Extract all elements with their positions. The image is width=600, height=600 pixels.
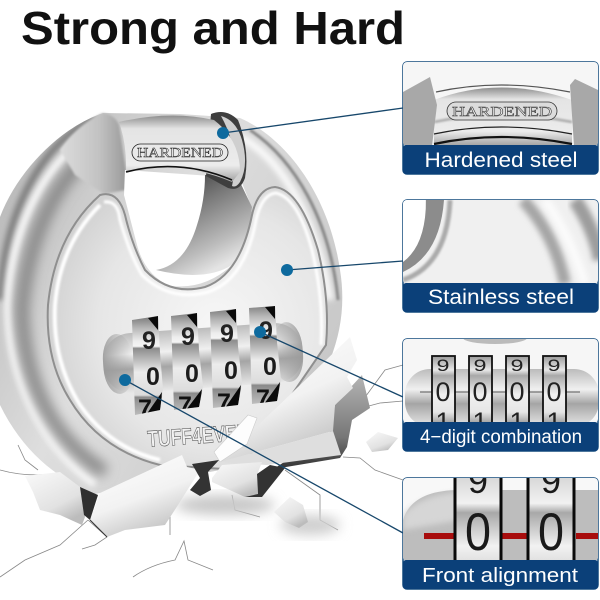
chunk: center crack xyxy=(190,460,219,496)
hardened stamp: HARDENED xyxy=(137,146,223,161)
chunk: dark right underside xyxy=(262,375,370,478)
padlock xyxy=(0,112,342,494)
raised plate xyxy=(48,187,327,470)
panel: 4-digit combination xyxy=(403,332,599,451)
panel: 4-digit combination: 1 xyxy=(509,407,525,437)
chunk: far left xyxy=(25,472,85,525)
combination bar xyxy=(101,321,305,395)
wheel 4 xyxy=(249,306,280,404)
wheel 2: 0 xyxy=(185,360,199,388)
wheel 3: 0 xyxy=(224,357,238,385)
panel: front alignment: 9 xyxy=(468,460,488,501)
wheel 1: 9 xyxy=(142,327,156,355)
chunk: center xyxy=(212,462,262,497)
wheel 3: 7 xyxy=(217,389,231,417)
wheel 1: 7 xyxy=(138,395,152,423)
broken ground chunks xyxy=(25,337,398,537)
panel: front alignment: Front alignment xyxy=(422,565,578,587)
chunk: pebble by panel xyxy=(366,432,398,452)
chunk: small shard xyxy=(214,415,257,462)
panel: 4-digit combination: 1 xyxy=(472,407,488,437)
shackle ring collar xyxy=(206,112,246,189)
panel: 4-digit combination: 0 xyxy=(435,377,451,407)
title: Strong and Hard xyxy=(21,2,405,54)
panel: 4-digit combination: 9 xyxy=(474,356,486,375)
panel: front alignment: 0 xyxy=(538,503,564,562)
chunk: large right xyxy=(220,337,357,462)
panel: front alignment: 0 xyxy=(465,503,491,562)
panel: 4-digit combination: 9 xyxy=(436,356,450,375)
panel: 4-digit combination: 1 xyxy=(546,407,562,437)
hardened steel pill xyxy=(447,102,557,120)
panel: front alignment xyxy=(402,477,599,590)
wheel 4: 0 xyxy=(263,353,277,381)
panel: 4-digit combination: 0 xyxy=(472,377,488,407)
ground cracks xyxy=(0,365,403,577)
panel: hardened steel: Hardened steel xyxy=(424,149,578,172)
wheel 1: 0 xyxy=(146,363,160,391)
panel: stainless steel: Stainless steel xyxy=(428,286,574,309)
brand engraving: TUFF4EVER xyxy=(147,419,250,452)
panel: 4-digit combination: 0 xyxy=(509,377,525,407)
panel: 4-digit combination: 0 xyxy=(546,377,562,407)
chunk: large left xyxy=(90,455,200,537)
panel: stainless steel xyxy=(403,200,600,312)
hole background xyxy=(124,170,252,287)
panel: hardened steel: HARDENED xyxy=(452,105,552,120)
shackle xyxy=(119,115,240,182)
chunk: pebble right xyxy=(274,497,308,528)
marker dots xyxy=(119,127,293,386)
panel: hardened steel xyxy=(403,62,598,174)
wheel 2: 9 xyxy=(181,323,195,351)
wheel 4: 9 xyxy=(259,317,273,345)
panel: 4-digit combination: 4−digit combination xyxy=(420,427,582,448)
wheel 2: 7 xyxy=(178,392,192,420)
wheel 4: 7 xyxy=(256,385,270,413)
wheel 1 xyxy=(132,316,162,415)
leader lines xyxy=(125,108,403,533)
wheel 2 xyxy=(171,313,202,410)
panel: 4-digit combination: 1 xyxy=(435,407,451,437)
panel: 4-digit combination: 9 xyxy=(510,356,524,375)
digit wheels xyxy=(132,306,280,415)
panel: front alignment: 9 xyxy=(541,460,561,501)
wheel 3 xyxy=(210,309,242,408)
wheel 3: 9 xyxy=(220,320,234,348)
left rim cap xyxy=(60,113,126,194)
panel: 4-digit combination: 9 xyxy=(548,356,560,375)
inner hole wall xyxy=(156,175,252,275)
padlock body xyxy=(0,113,342,494)
